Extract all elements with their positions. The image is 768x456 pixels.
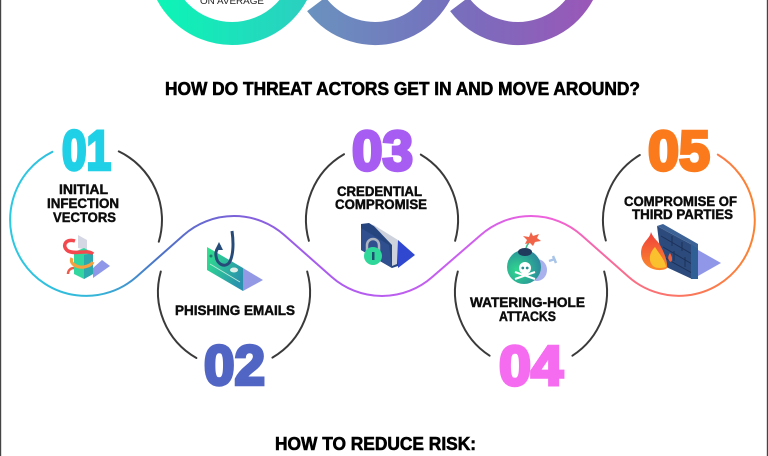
label: watering-hole attacks: WATERING-HOLE [470,295,585,310]
label: watering-hole attacks [470,295,585,324]
number 04: 04 [499,334,563,397]
step 05 [624,119,737,279]
ring 3 [459,0,592,33]
top ring statistics [158,0,592,34]
label: compromise of third parties: COMPROMISE OF [624,194,737,209]
dark circle arcs [119,151,640,358]
skull [515,262,535,279]
icon: locked folder [361,223,415,268]
icon: bomb [507,232,556,284]
icon: usb drive with snake [65,235,110,279]
number 01: 01 [62,118,111,182]
heading: how to reduce risk: HOW TO REDUCE RISK: [275,434,476,454]
gradient wave line [10,152,755,296]
label: phishing emails: PHISHING EMAILS [175,303,295,318]
label: compromise of third parties [624,194,737,222]
label: initial infection vectors: INITIAL [59,182,108,197]
heading: threat actors: HOW DO THREAT ACTORS GET IN AND MOVE AROUND? [165,79,640,99]
step 02 [175,231,295,396]
number 05: 05 [648,119,710,182]
label: credential compromise: CREDENTIAL [337,184,422,199]
ring 1 [158,0,306,34]
label: credential compromise [335,184,427,212]
label: credential compromise: COMPROMISE [335,197,427,212]
label: compromise of third parties: THIRD PARTIES [632,207,733,222]
icon: firewall with flame [641,224,721,279]
number 03: 03 [352,119,413,182]
label: watering-hole attacks: ATTACKS [499,309,556,324]
ring 2 [316,0,448,33]
label: initial infection vectors: VECTORS [53,210,116,225]
number 02: 02 [204,334,265,396]
icon: credit card on hook [207,231,263,291]
label: initial infection vectors [47,182,119,225]
label: initial infection vectors: INFECTION [47,196,119,211]
step 03 [335,119,427,268]
step 04 [470,232,585,397]
step 01 [47,118,119,279]
